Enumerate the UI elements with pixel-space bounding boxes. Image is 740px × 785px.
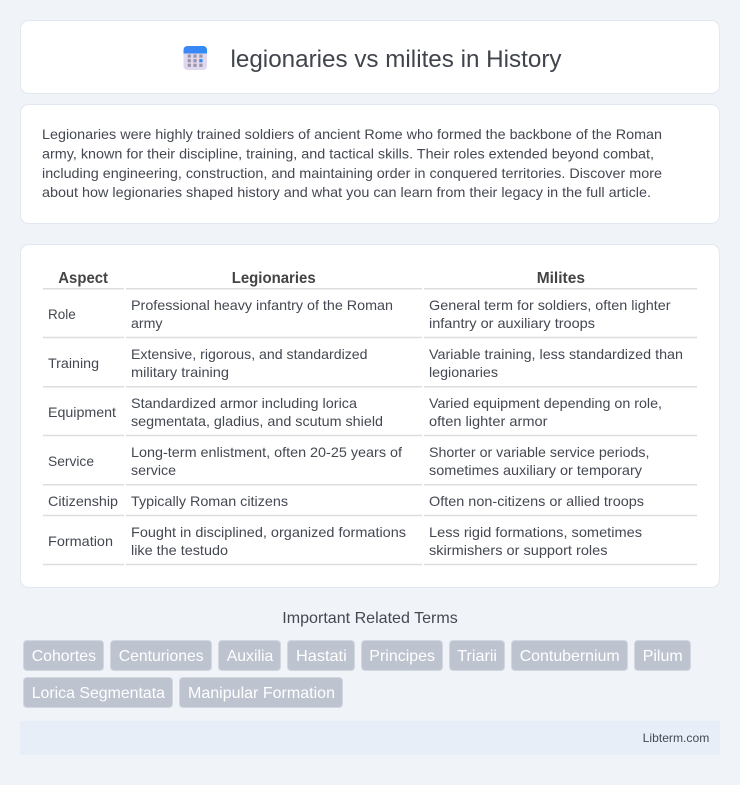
row: role: General term for soldiers, often lighter — [429, 297, 671, 313]
title: legionaries vs milites in History — [230, 46, 562, 73]
row: service: Long-term enlistment, often 20-25 years of — [131, 444, 402, 460]
table header row — [58, 270, 585, 287]
intro text — [42, 126, 662, 200]
row: equipment — [48, 395, 662, 429]
row: role: army — [131, 315, 162, 331]
row: role: Role — [48, 306, 76, 322]
panel: header — [20, 20, 720, 94]
row: training: military training — [131, 364, 229, 380]
row: equipment: often lighter armor — [429, 413, 548, 429]
related term tags: Principes — [369, 648, 435, 665]
related terms heading: Important Related Terms — [282, 610, 458, 627]
footer — [20, 721, 720, 755]
intro text: about how legionaries shaped history and what you can learn from their legacy in the full article. — [42, 184, 651, 200]
row: citizenship: Citizenship — [48, 493, 118, 509]
row: citizenship: Typically Roman citizens — [131, 493, 288, 509]
row: formation: Formation — [48, 533, 113, 549]
row: training — [48, 346, 683, 380]
footer: Libterm.com — [643, 731, 709, 745]
related term tags: Hastati — [296, 648, 347, 665]
icon: calendar — [184, 46, 207, 70]
panel: comparison table — [20, 244, 720, 588]
row: training: legionaries — [429, 364, 498, 380]
related term tags — [24, 640, 690, 708]
panel: introduction — [20, 104, 720, 224]
row: formation — [48, 524, 642, 558]
row: training: Extensive, rigorous, and standardized — [131, 346, 368, 362]
related term tags: Centuriones — [119, 648, 204, 665]
related term tags: Triarii — [457, 648, 497, 665]
related term tags: Auxilia — [227, 648, 273, 665]
row: role: Professional heavy infantry of the Roman — [131, 297, 393, 313]
row: service — [48, 444, 650, 478]
intro text: Legionaries were highly trained soldiers of ancient Rome who formed the backbone of the Roman — [42, 126, 662, 142]
table header row: Milites — [537, 270, 585, 287]
row: role — [48, 297, 671, 331]
row: equipment: Standardized armor including lorica — [131, 395, 357, 411]
row: service: service — [131, 462, 176, 478]
row: equipment: Varied equipment depending on role, — [429, 395, 662, 411]
row: equipment: segmentata, gladius, and scutum shield — [131, 413, 383, 429]
related term tags: Pilum — [643, 648, 683, 665]
related term tags: Manipular Formation — [188, 685, 335, 702]
row: equipment: Equipment — [48, 404, 116, 420]
row: service: Service — [48, 453, 94, 469]
row: citizenship — [48, 493, 644, 509]
table header row: Legionaries — [232, 270, 316, 287]
row: formation: Less rigid formations, sometimes — [429, 524, 642, 540]
related term tags: Contubernium — [520, 648, 620, 665]
row: service: sometimes auxiliary or temporary — [429, 462, 642, 478]
intro text: army, known for their discipline, training, and tactical skills. Their roles extended beyond combat, — [42, 146, 654, 162]
row: formation: Fought in disciplined, organized formations — [131, 524, 406, 540]
row: role: infantry or auxiliary troops — [429, 315, 595, 331]
row: formation: like the testudo — [131, 542, 228, 558]
row: training: Variable training, less standardized than — [429, 346, 683, 362]
table header row: Aspect — [58, 270, 109, 287]
row: citizenship: Often non-citizens or allied troops — [429, 493, 644, 509]
row: training: Training — [48, 355, 99, 371]
related term tags: Lorica Segmentata — [32, 685, 165, 702]
related term tags: Cohortes — [32, 648, 96, 665]
row: formation: skirmishers or support roles — [429, 542, 608, 558]
intro text: including engineering, construction, and maintaining order in conquered territories. Discover more — [42, 165, 662, 181]
row: service: Shorter or variable service periods, — [429, 444, 650, 460]
